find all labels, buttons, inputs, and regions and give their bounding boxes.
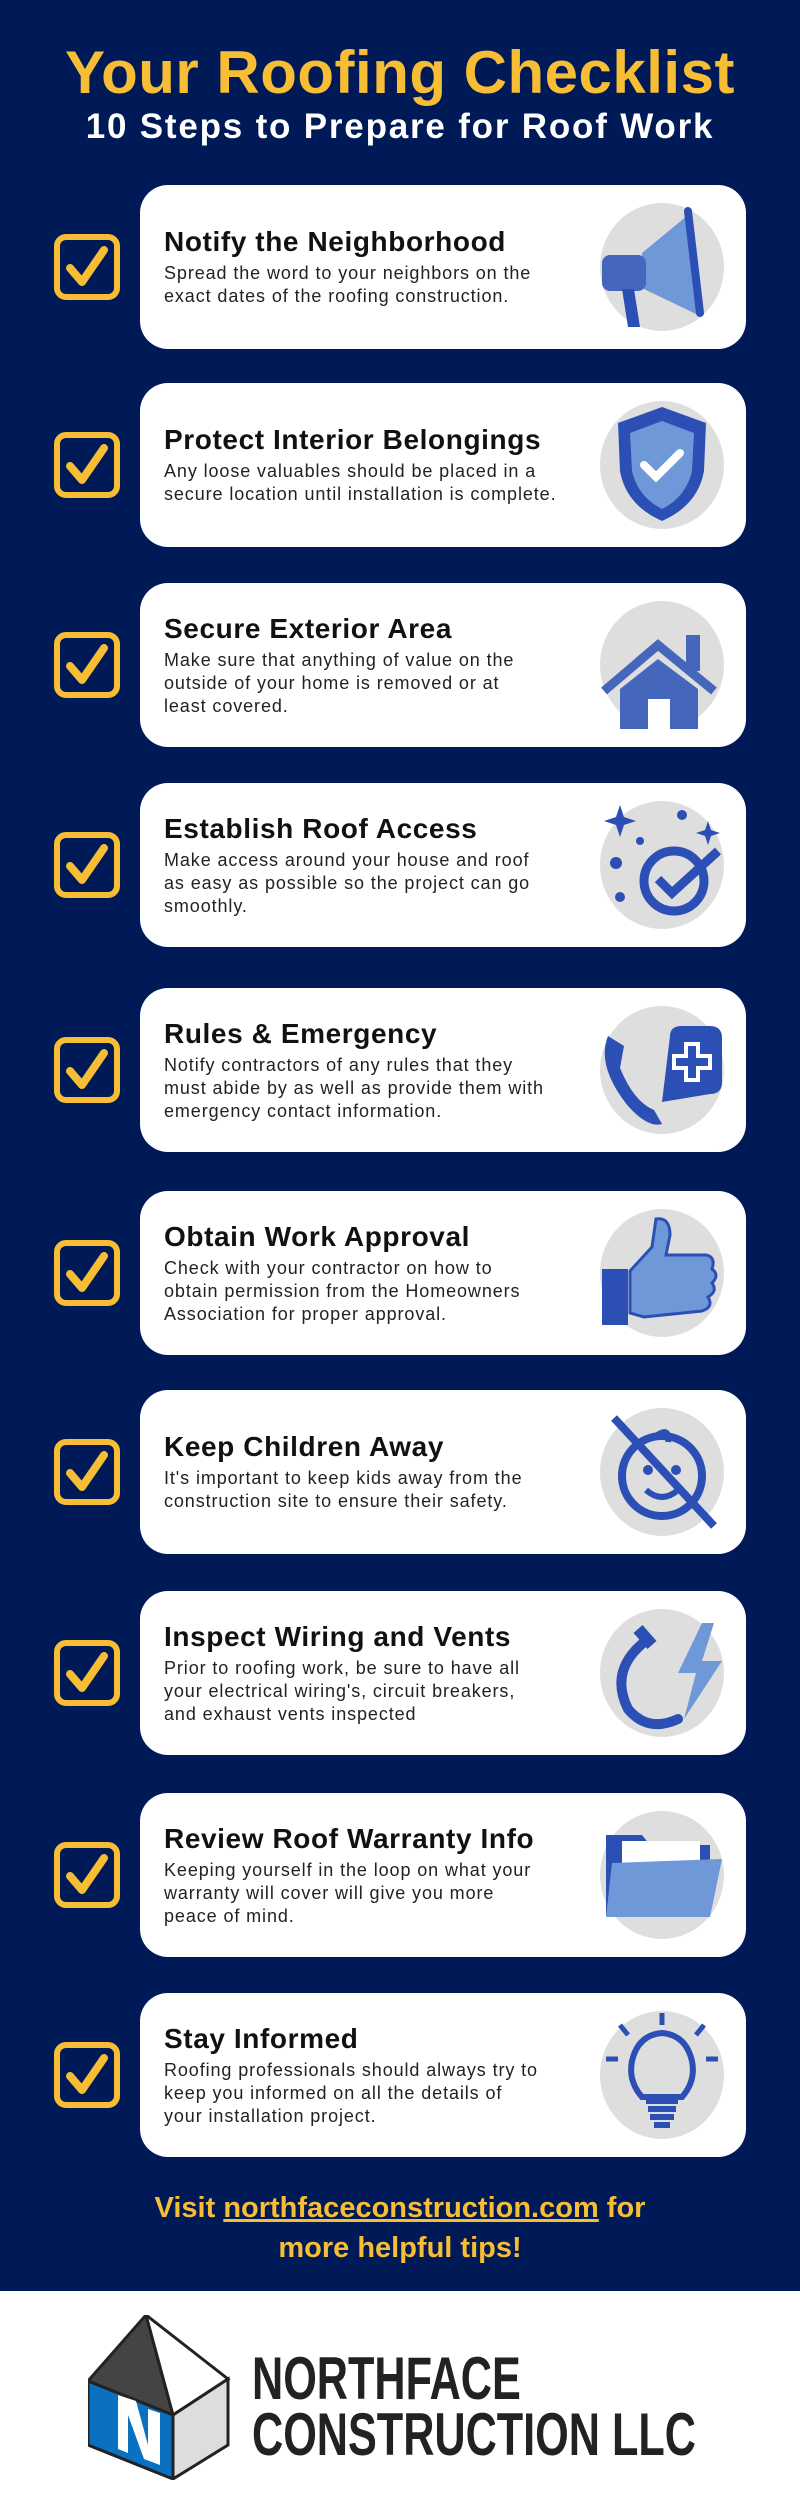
text: Obtain Work Approval	[164, 1220, 470, 1252]
text: your installation project.	[164, 2106, 376, 2126]
text: warranty will cover will give you more	[164, 1882, 494, 1902]
text	[164, 1018, 544, 1121]
text: Keeping yourself in the loop on what your	[164, 1860, 531, 1880]
text: Review Roof Warranty Info	[164, 1822, 534, 1854]
text: Prior to roofing work, be sure to have all	[164, 1658, 520, 1678]
text: Inspect Wiring and Vents	[164, 1620, 511, 1652]
card	[140, 988, 746, 1152]
text: Protect Interior Belongings	[164, 424, 541, 455]
text: Stay Informed	[164, 2022, 359, 2054]
text	[164, 612, 514, 716]
text: Establish Roof Access	[164, 812, 477, 844]
text: Keep Children Away	[164, 1431, 444, 1462]
card	[140, 383, 746, 547]
step 1: notify the neighborhood	[54, 185, 746, 349]
icon: house	[600, 601, 724, 729]
card	[140, 185, 746, 349]
step 5: rules & emergency	[54, 988, 746, 1152]
icon: sparkle check	[600, 801, 724, 929]
text: keep you informed on all the details of	[164, 2082, 502, 2102]
call to action: more helpful tips!	[278, 2232, 522, 2264]
checkbox	[54, 1240, 120, 1306]
text: Secure Exterior Area	[164, 612, 452, 644]
step 10: stay informed	[54, 1993, 746, 2157]
text	[164, 1620, 520, 1724]
step 4: establish roof access	[54, 783, 746, 947]
icon: shield	[600, 401, 724, 529]
icon: wire and bolt	[600, 1609, 724, 1737]
card	[140, 1191, 746, 1355]
card	[140, 1793, 746, 1957]
checkbox	[54, 234, 120, 300]
step 3: secure exterior area	[54, 583, 746, 747]
company name line 1: NORTHFACE	[252, 2345, 521, 2412]
checkbox	[54, 832, 120, 898]
step 8: inspect wiring and vents	[54, 1591, 746, 1755]
call to action: Visit northfaceconstruction.com for	[155, 2192, 645, 2224]
icon: megaphone	[600, 203, 724, 331]
card	[140, 583, 746, 747]
text: must abide by as well as provide them with	[164, 1078, 544, 1098]
checkbox	[54, 632, 120, 698]
icon: no children	[600, 1408, 724, 1536]
card	[140, 783, 746, 947]
icon: thumbs up	[600, 1209, 724, 1337]
text: and exhaust vents inspected	[164, 1704, 416, 1724]
text: emergency contact information.	[164, 1100, 442, 1120]
text: construction site to ensure their safety.	[164, 1491, 508, 1511]
title: Your Roofing Checklist	[65, 39, 735, 106]
text: Association for proper approval.	[164, 1304, 447, 1324]
text: Make access around your house and roof	[164, 850, 529, 870]
text	[164, 1220, 520, 1324]
text	[164, 226, 531, 306]
checkbox	[54, 1640, 120, 1706]
checkbox	[54, 1037, 120, 1103]
icon: folder	[600, 1811, 724, 1939]
step 2: protect interior belongings	[54, 383, 746, 547]
text: Rules & Emergency	[164, 1018, 437, 1048]
text: least covered.	[164, 696, 289, 716]
icon: lightbulb	[600, 2011, 724, 2139]
step 6: obtain work approval	[54, 1191, 746, 1355]
text: as easy as possible so the project can go	[164, 872, 530, 892]
checkbox	[54, 2042, 120, 2108]
text: peace of mind.	[164, 1906, 295, 1926]
card	[140, 1390, 746, 1554]
text: Spread the word to your neighbors on the	[164, 263, 531, 283]
icon: phone with cross	[600, 1006, 724, 1134]
text: secure location until installation is complete.	[164, 484, 556, 504]
company name line 2: CONSTRUCTION LLC	[252, 2401, 696, 2468]
text	[164, 812, 530, 916]
text: Notify contractors of any rules that they	[164, 1054, 513, 1074]
call to action	[154, 2192, 645, 2264]
text	[164, 424, 556, 504]
text	[164, 2022, 538, 2126]
text	[164, 1822, 534, 1926]
checkbox	[54, 1842, 120, 1908]
subtitle: 10 Steps to Prepare for Roof Work	[86, 107, 714, 146]
text: exact dates of the roofing construction.	[164, 286, 509, 306]
text	[164, 1431, 522, 1511]
step 9: review roof warranty info	[54, 1793, 746, 1957]
text: Notify the Neighborhood	[164, 226, 506, 257]
text: Any loose valuables should be placed in a	[164, 461, 536, 481]
logo	[88, 2315, 696, 2480]
card	[140, 1591, 746, 1755]
text: Make sure that anything of value on the	[164, 650, 514, 670]
logo mark	[88, 2315, 230, 2480]
checkbox	[54, 1439, 120, 1505]
text: smoothly.	[164, 896, 248, 916]
text: obtain permission from the Homeowners	[164, 1280, 520, 1300]
checkbox	[54, 432, 120, 498]
text: It's important to keep kids away from the	[164, 1468, 522, 1488]
text: Check with your contractor on how to	[164, 1258, 493, 1278]
text: your electrical wiring's, circuit breakers,	[164, 1680, 515, 1700]
text: Roofing professionals should always try to	[164, 2060, 538, 2080]
step 7: keep children away	[54, 1390, 746, 1554]
card	[140, 1993, 746, 2157]
text: outside of your home is removed or at	[164, 672, 499, 692]
